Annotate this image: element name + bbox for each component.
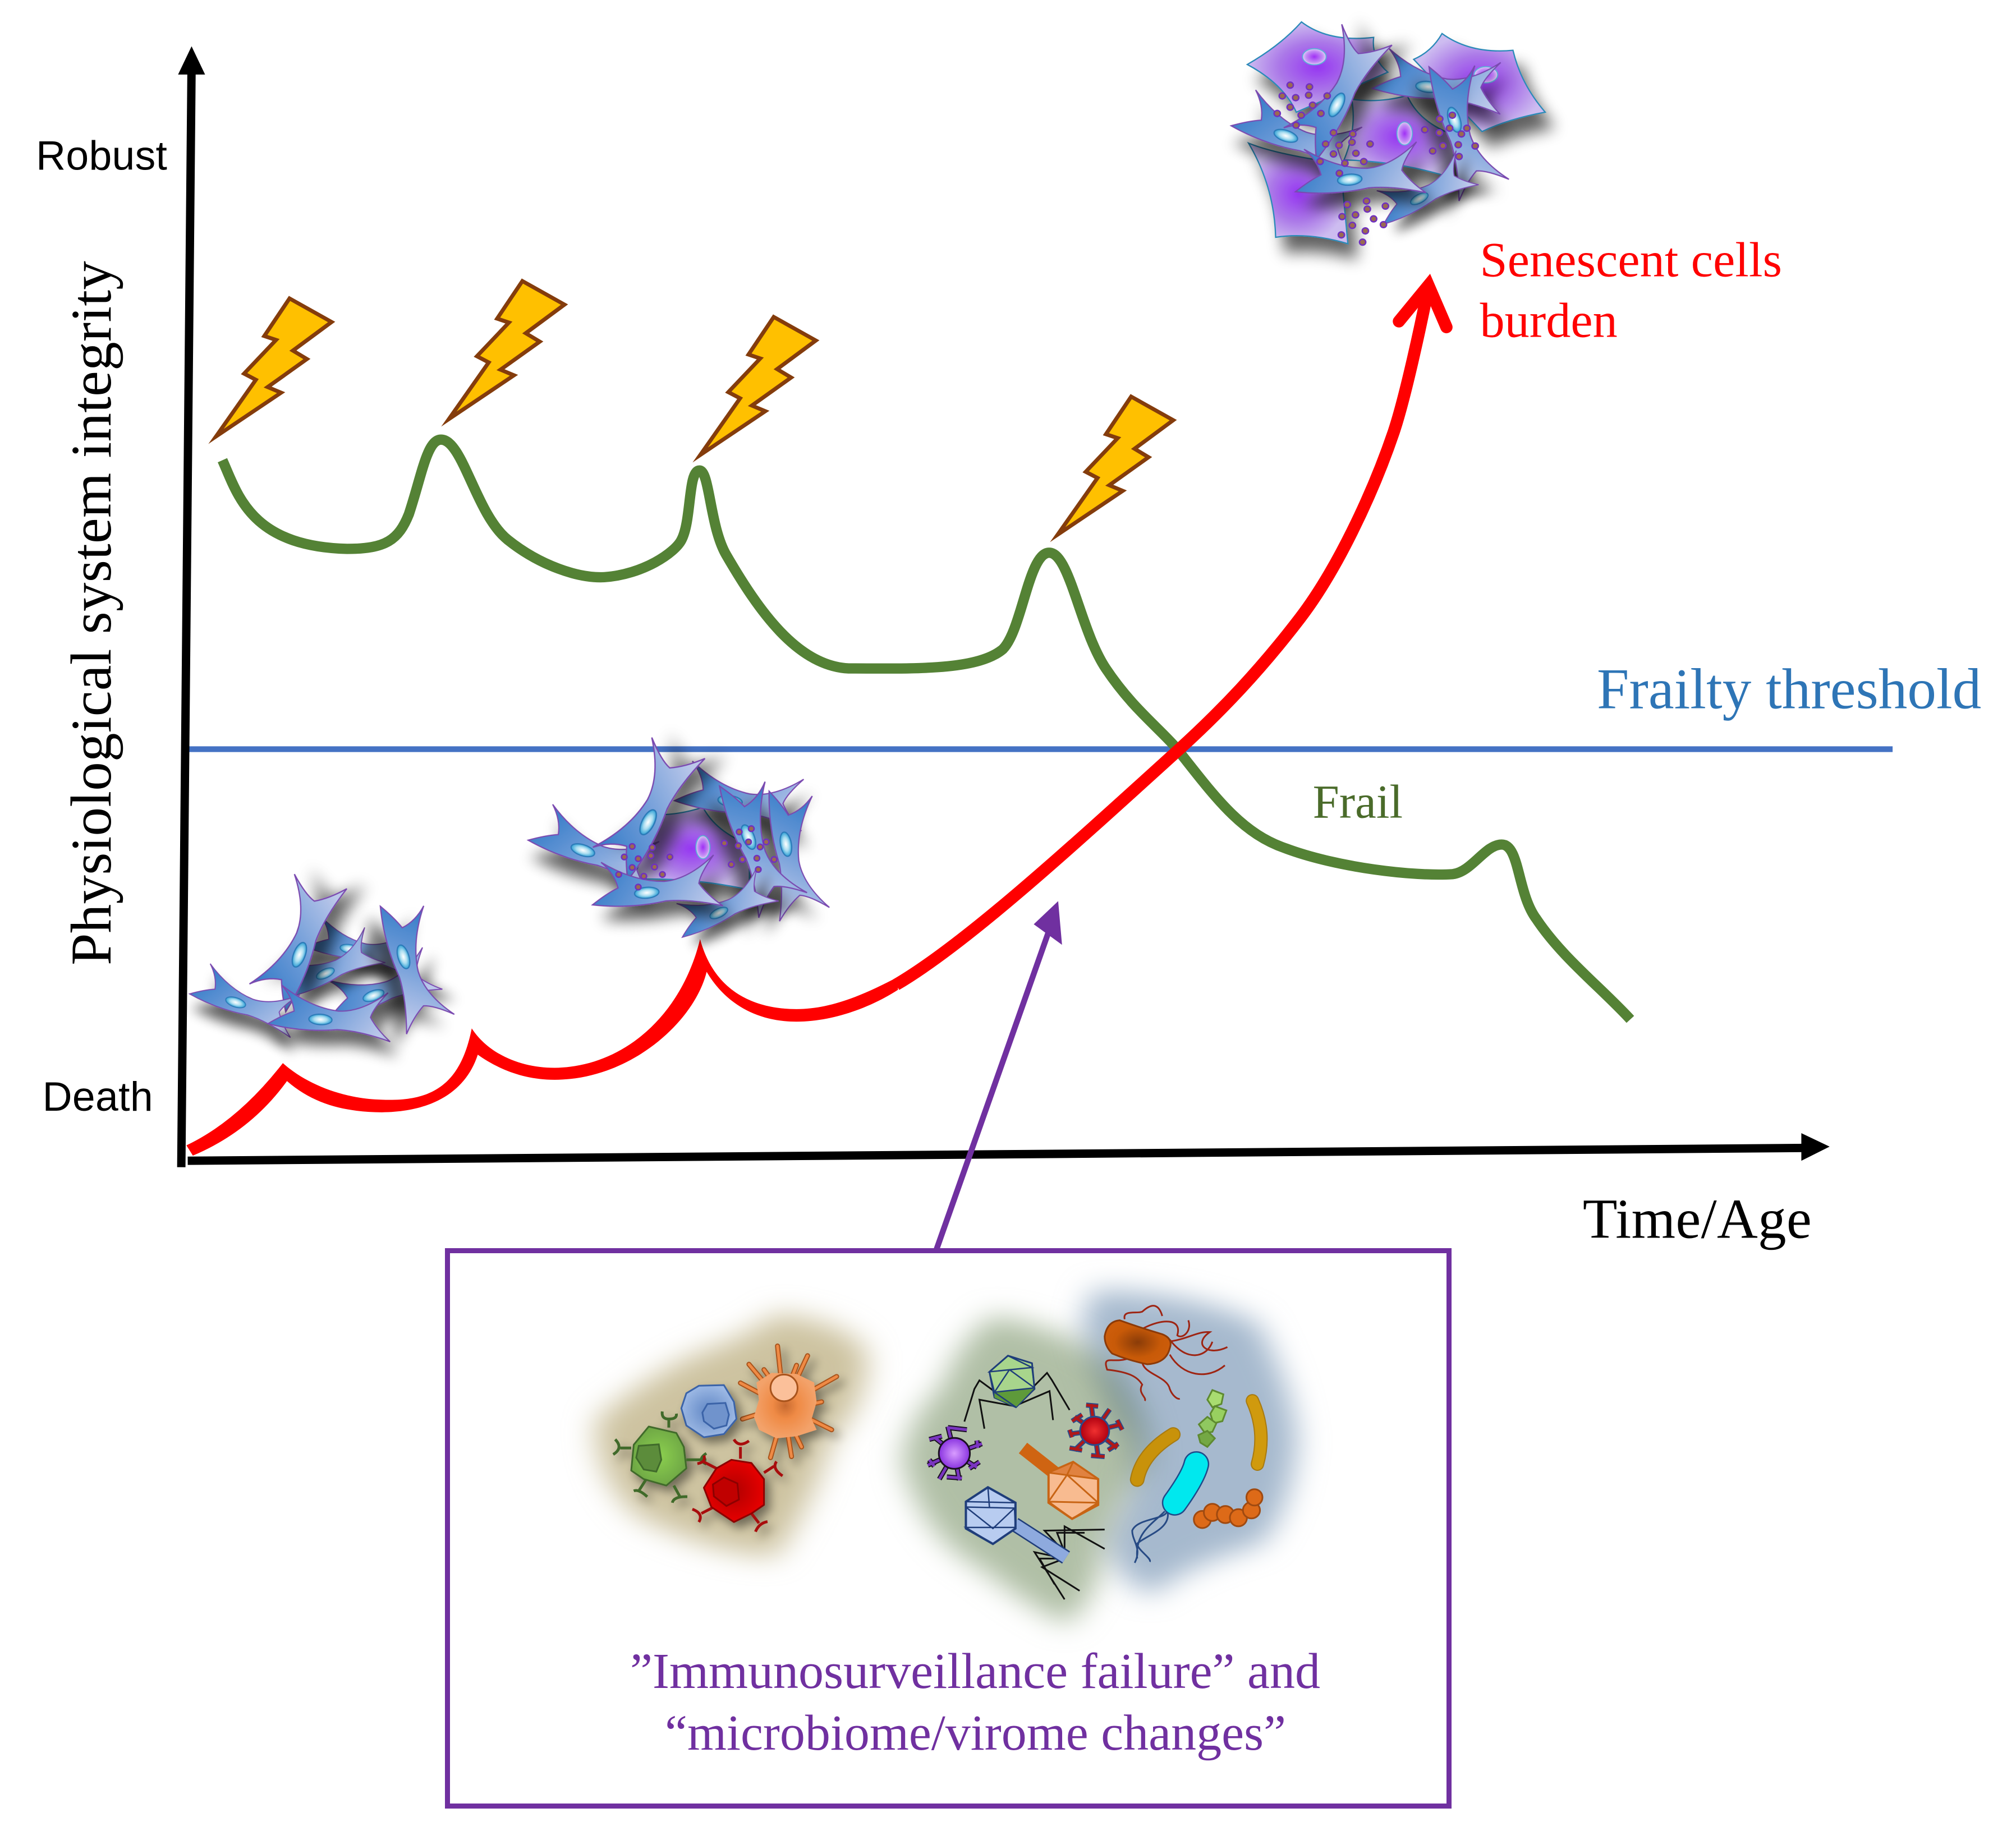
bacterium: gold rod left xyxy=(1137,1434,1173,1479)
purple arrow to curve xyxy=(936,901,1062,1251)
background haze: virome xyxy=(902,1316,1148,1625)
microbe illustration xyxy=(596,1290,1298,1625)
senescent cell: bottom left xyxy=(1248,143,1348,243)
bacterium: gold rod right xyxy=(1252,1401,1261,1464)
label: Death: Death xyxy=(43,1074,153,1120)
label: Frail: Frail xyxy=(1313,775,1403,828)
label: Senescent cells burden: burden xyxy=(1480,293,1618,348)
background haze: immune cells xyxy=(596,1314,867,1556)
y axis title: Physiological system integrity xyxy=(59,261,123,965)
background haze: microbiome xyxy=(1082,1290,1298,1595)
panel frame xyxy=(448,1251,1449,1806)
label: Frailty threshold: Frailty threshold xyxy=(1597,657,1981,721)
lightning bolt 2 xyxy=(449,281,564,419)
cell clusters xyxy=(186,19,1545,1042)
green curve: physiological integrity xyxy=(222,440,1631,1019)
panel caption: ”Immunosurveillance failure” and xyxy=(630,1644,1320,1699)
panel caption xyxy=(630,1644,1320,1761)
cell cluster: medium senescence xyxy=(525,732,833,946)
senescent cell: top left xyxy=(1247,22,1388,112)
label: Robust: Robust xyxy=(36,132,167,178)
bacterium: cyan flagellated xyxy=(1132,1464,1196,1563)
virus: orange phage xyxy=(1023,1448,1098,1519)
panel: immunosurveillance and microbiome box xyxy=(448,1251,1449,1806)
secretion dots: high senescence cluster xyxy=(1274,82,1478,245)
senescent cell: top right xyxy=(1413,34,1545,131)
virus: blue phage xyxy=(966,1487,1105,1599)
virus: purple spiked xyxy=(928,1427,982,1480)
red curve: senescent cell burden xyxy=(186,286,1446,1156)
panel caption: “microbiome/virome changes” xyxy=(665,1705,1286,1761)
secretion dots: medium senescence cluster xyxy=(616,826,777,890)
immune cell: orange dendritic xyxy=(741,1346,837,1457)
chart xyxy=(36,46,1981,1251)
lightning bolt 3 xyxy=(700,317,816,455)
x axis title: Time/Age xyxy=(1583,1188,1812,1250)
lightning bolt 1 xyxy=(216,298,332,436)
x axis arrow xyxy=(188,1133,1830,1161)
cell cluster: low senescence xyxy=(186,868,458,1042)
lightning bolt 4 xyxy=(1058,397,1173,535)
immune cell: green xyxy=(613,1411,706,1503)
cell cluster: high senescence xyxy=(1227,19,1545,243)
immune cell: red xyxy=(692,1439,783,1531)
label: Senescent cells burden xyxy=(1480,233,1782,348)
bacterium: orange coccus chain xyxy=(1194,1489,1262,1528)
label: Senescent cells burden: Senescent cells xyxy=(1480,233,1782,288)
virus: green phage xyxy=(965,1356,1069,1429)
bacterium: green chain xyxy=(1198,1390,1227,1447)
senescent cell xyxy=(633,807,750,890)
frailty threshold line xyxy=(187,748,1893,751)
y axis arrow xyxy=(178,46,205,1167)
immune cell: blue lymphocyte xyxy=(681,1385,737,1437)
virus: red spiked xyxy=(1069,1404,1122,1457)
senescent cell: centre xyxy=(1344,95,1455,178)
bacterium: orange flagellated xyxy=(1105,1306,1228,1401)
